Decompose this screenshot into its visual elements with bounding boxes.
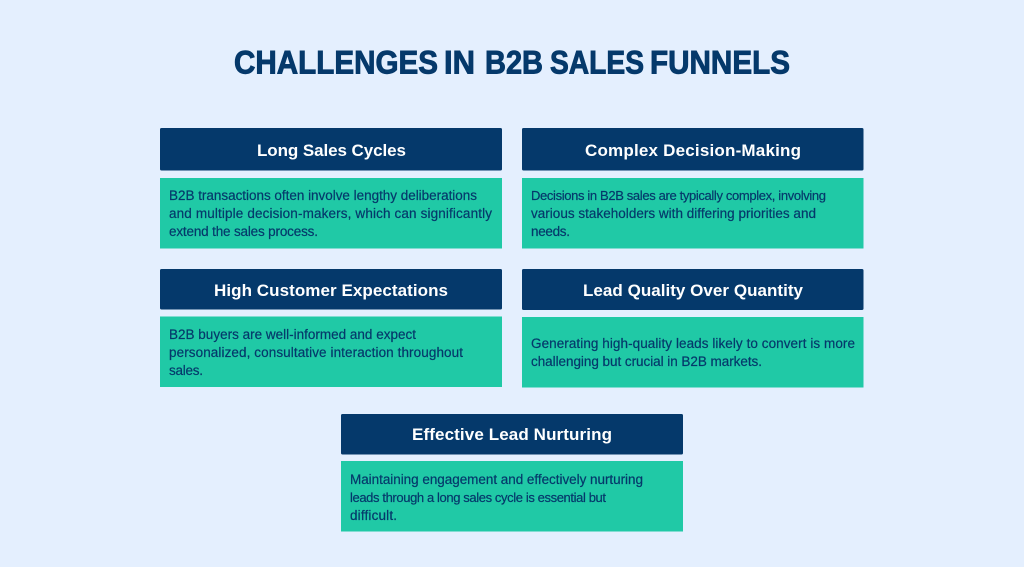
text block: effective lead nurturing: leads through a long sales cycle is essential but — [350, 490, 606, 505]
text block: high customer expectations: personalized, consultative interaction throughout — [169, 345, 463, 360]
text block: complex decision-making: needs. — [531, 224, 570, 239]
panel: high customer expectations — [160, 269, 502, 387]
text block: lead quality over quantity — [522, 317, 864, 388]
text block: lead quality over quantity: Generating high-quality leads likely to convert is more — [531, 336, 855, 351]
text block: high customer expectations — [160, 316, 502, 387]
panel: long sales cycles — [160, 128, 502, 248]
heading bar: effective lead nurturing — [341, 414, 683, 454]
title: FUNNELS — [650, 44, 790, 80]
text block: lead quality over quantity: challenging but crucial in B2B markets. — [531, 354, 762, 369]
heading bar: long sales cycles: Long Sales Cycles — [257, 141, 406, 160]
panel: effective lead nurturing — [341, 414, 683, 532]
heading bar: lead quality over quantity — [522, 269, 864, 310]
text block: effective lead nurturing — [341, 461, 683, 532]
heading bar: complex decision-making — [522, 128, 864, 170]
text block: complex decision-making: various stakeholders with differing priorities and — [531, 206, 816, 221]
text block: effective lead nurturing: Maintaining engagement and effectively nurturing — [350, 472, 643, 487]
heading bar: complex decision-making: Complex Decision-Making — [585, 141, 801, 160]
text block: complex decision-making — [522, 178, 864, 248]
panel: lead quality over quantity — [522, 269, 864, 388]
text block: long sales cycles: and multiple decision-makers, which can significantly — [169, 206, 492, 221]
text block: high customer expectations: B2B buyers are well-informed and expect — [169, 327, 416, 342]
heading bar: high customer expectations — [160, 269, 502, 310]
heading bar: lead quality over quantity: Lead Quality Over Quantity — [583, 281, 804, 300]
title: SALES — [550, 44, 644, 80]
text block: complex decision-making: Decisions in B2B sales are typically complex, involving — [531, 188, 826, 203]
title: B2B — [485, 44, 543, 80]
title: IN — [444, 44, 475, 80]
text block: effective lead nurturing: difficult. — [350, 508, 397, 523]
panel: complex decision-making — [522, 128, 864, 248]
text block: high customer expectations: sales. — [169, 363, 203, 378]
heading bar: high customer expectations: High Customer Expectations — [214, 281, 448, 300]
text block: long sales cycles: B2B transactions often involve lengthy deliberations — [169, 188, 477, 203]
title: CHALLENGES — [234, 44, 438, 80]
heading bar: long sales cycles — [160, 128, 502, 170]
text block: long sales cycles — [160, 178, 502, 248]
heading bar: effective lead nurturing: Effective Lead Nurturing — [412, 425, 612, 444]
text block: long sales cycles: extend the sales process. — [169, 224, 318, 239]
